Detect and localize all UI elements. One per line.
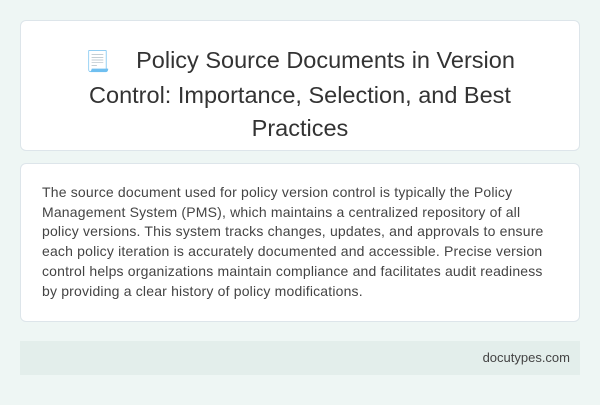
description text: The source document used for policy version control is typically the Policy (42, 184, 512, 200)
description text (42, 184, 544, 299)
footer (20, 341, 580, 375)
description text: by providing a clear history of policy modifications. (42, 283, 363, 299)
header card (20, 20, 580, 151)
description text: Management System (PMS), which maintains a centralized repository of all (42, 204, 520, 220)
description card (20, 163, 580, 322)
description text: policy versions. This system tracks changes, updates, and approvals to ensure (42, 223, 544, 239)
title: 📃 Policy Source Documents in Version Control: Importance, Selection, and Best Practices (85, 47, 515, 141)
description text: control helps organizations maintain compliance and facilitates audit readiness (42, 263, 543, 279)
description text: each policy iteration is accurately documented and accessible. Precise version (42, 243, 542, 259)
footer: docutypes.com (483, 350, 570, 365)
